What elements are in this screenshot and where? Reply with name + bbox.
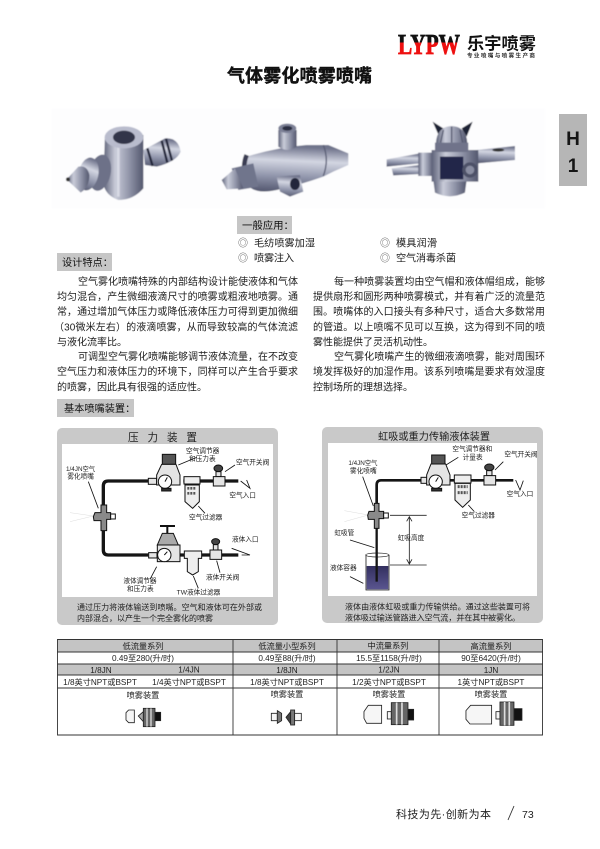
application list: ◎ <box>238 252 248 264</box>
text block: right column: 雾性能提供了灵活机动性。 <box>313 336 433 348</box>
diagram labels: 计量表 <box>463 452 483 461</box>
liquid regulator <box>149 526 180 562</box>
diagram labels: 液体开关阀 <box>206 573 240 582</box>
nozzle fitting <box>368 503 384 528</box>
table text: 15.5至1158(升/时) <box>356 653 422 663</box>
text block: right column: 控制场所的理想选择。 <box>313 380 413 394</box>
diagram labels: 空气调节器和 <box>452 444 492 453</box>
diagram labels: 雾化喷嘴 <box>350 466 377 475</box>
text block: right column: 境发挥极好的加湿作用。该系列喷嘴是要求有效湿度 <box>313 365 545 378</box>
diagram labels: 雾化喷嘴 <box>67 472 94 481</box>
label: general applications <box>237 216 294 234</box>
air filter <box>454 475 471 507</box>
diagram labels: 虹吸管 <box>334 528 355 537</box>
table text: 0.49至88(升/时) <box>258 653 316 663</box>
label: basic nozzle setups <box>57 399 135 417</box>
label: design features <box>57 253 113 271</box>
air valve <box>213 465 225 486</box>
air regulator <box>148 454 180 491</box>
diagram: pressure system <box>66 446 270 596</box>
assembly: low flow <box>126 708 161 727</box>
diagram labels: 液体容器 <box>330 563 357 572</box>
diagram labels: 空气开关阀 <box>236 457 270 466</box>
panel heading: 虹吸或重力传输液体装置 <box>378 430 490 443</box>
footer slogan: 科技为先·创新为本 <box>396 807 491 821</box>
table text: 1/2英寸NPT或BSPT <box>352 677 426 687</box>
table text: 1英寸NPT或BSPT <box>458 677 524 687</box>
nozzle fitting <box>93 505 111 531</box>
section tab H1: 1 <box>568 156 579 177</box>
siphon height bracket <box>390 515 427 565</box>
diagram labels: 1/4JN空气 <box>66 464 96 473</box>
text block: left column: 空气压力和液体压力的环境下，同样可以产生合乎要求 <box>57 365 298 378</box>
panel: pressure setup <box>57 428 278 625</box>
text block: right column: 围。喷嘴体的入口接头有多种尺寸，适合大多数常用 <box>313 305 545 318</box>
diagram labels <box>66 446 270 596</box>
assembly: medium flow <box>364 703 414 725</box>
application list: 空气消毒杀菌 <box>396 252 456 264</box>
photo: nozzle three <box>387 122 515 196</box>
panel heading: 压力装置 <box>128 431 197 444</box>
logo tagline: 专业喷嘴与喷雾生产商 <box>467 52 535 60</box>
assembly: high flow <box>466 702 522 725</box>
table text: 低流量系列 <box>123 641 163 651</box>
text block: right column: 提供扇形和圆形两种喷雾模式，并有着广泛的流量范 <box>313 290 545 303</box>
panel caption <box>345 602 530 622</box>
table text: 喷雾装置 <box>271 689 303 699</box>
page number: 73 <box>522 809 534 821</box>
panel caption: 液体由液体虹吸或重力传输供给。通过这些装置可将 <box>345 602 530 612</box>
panel: siphon or gravity setup <box>322 427 543 623</box>
footer divider slash <box>508 806 514 820</box>
air regulator <box>421 455 450 491</box>
diagram labels: 虹吸高度 <box>398 533 425 542</box>
text block: left column: 与液化流率比。 <box>57 336 127 348</box>
nozzle fitting end <box>111 514 115 519</box>
application list: ◎ <box>238 238 248 250</box>
nozzle assemblies <box>126 702 522 727</box>
table text: 1/8JN <box>276 666 298 675</box>
text block: left column <box>54 275 298 394</box>
table text: 1/4JN <box>178 666 200 674</box>
table text: 1/4英寸NPT或BSPT <box>152 677 226 687</box>
panel caption: 液体吸过输送管路进入空气流，并在其中被雾化。 <box>345 612 520 622</box>
text block: left column: 空气雾化喷嘴特殊的内部结构设计能使液体和气体 <box>78 275 298 288</box>
panel caption <box>77 602 262 623</box>
table text: 1/8英寸NPT或BSPT <box>63 677 137 687</box>
diagram labels <box>330 444 538 572</box>
assembly: low flow small <box>271 710 301 725</box>
text block: right column: 空气雾化喷嘴产生的微细液滴喷雾，能对周围环 <box>334 350 545 363</box>
application list: 模具润滑 <box>396 236 437 250</box>
table shaded rows <box>57 639 543 675</box>
text block: right column <box>313 275 545 394</box>
table text: 中流量系列 <box>368 640 408 650</box>
photo: nozzle two <box>222 124 348 197</box>
table text: 1/2JN <box>378 666 400 674</box>
application list: ◎ <box>380 252 390 264</box>
text block: right column: 的管道。以上喷嘴不见可以互换，这为得到不同的喷 <box>313 320 545 334</box>
table text: 1JN <box>484 666 498 675</box>
panel caption: 内部混合，以产生一个完全雾化的喷雾 <box>77 613 213 623</box>
logo company name: 乐宇喷雾 <box>467 34 536 54</box>
text block: left column: （30微米左右）的液滴喷雾，从而导致较高的气体流滤 <box>54 320 298 334</box>
diagram labels: 和压力表 <box>127 584 154 593</box>
leader arrows <box>350 457 523 583</box>
text block: right column: 每一种喷雾装置均由空气帽和液体帽组成，能够 <box>334 275 545 288</box>
table text: 1/8JN <box>90 666 112 675</box>
label: basic nozzle setups: 基本喷嘴装置： <box>64 402 135 415</box>
diagram labels: 空气入口 <box>229 491 256 500</box>
air valve <box>484 464 496 485</box>
logo <box>398 30 536 61</box>
title: 气体雾化喷雾喷嘴 <box>227 65 372 86</box>
table text <box>63 640 524 700</box>
specification table <box>57 639 543 735</box>
label: general applications: 一般应用： <box>242 219 294 232</box>
product photos <box>52 108 545 208</box>
diagram labels: 和压力表 <box>189 454 216 463</box>
diagram labels: 液体调节器 <box>123 576 157 585</box>
photo: nozzle one <box>66 126 181 200</box>
table text: 喷雾装置 <box>127 690 159 700</box>
table text: 低流量小型系列 <box>258 641 316 651</box>
application list: 毛纺喷雾加湿 <box>254 236 315 250</box>
diagram labels: 空气开关阀 <box>504 450 538 459</box>
text block: left column: 常，通过增加气体压力或降低液体压力可得到更加微细 <box>57 305 298 318</box>
diagram: siphon system <box>330 444 538 590</box>
text block: left column: 可调型空气雾化喷嘴能够调节液体流量，在不改变 <box>78 350 298 363</box>
nozzle fitting end <box>384 513 388 518</box>
application list: 喷雾注入 <box>254 252 294 264</box>
panel caption: 通过压力将液体输送到喷嘴。空气和液体可在外部或 <box>77 602 262 612</box>
application list: ◎ <box>380 238 390 250</box>
table text: 高流量系列 <box>471 641 511 651</box>
diagram labels: 空气调节器 <box>186 446 220 455</box>
label: design features: 设计特点： <box>62 256 113 269</box>
table text: 喷雾装置 <box>373 689 405 699</box>
table text: 0.49至280(升/时) <box>112 653 174 663</box>
table text: 90至6420(升/时) <box>461 653 521 663</box>
liquid valve <box>210 539 222 559</box>
logo wordmark LYPW: LYPW <box>398 30 460 61</box>
section tab H1: H <box>566 129 580 150</box>
liquid filter <box>184 551 202 575</box>
application list <box>238 236 456 264</box>
table text: 1/8英寸NPT或BSPT <box>250 677 324 687</box>
air filter <box>184 477 200 508</box>
diagram labels: TW液体过滤器 <box>177 587 221 596</box>
diagram labels: 1/4JN空气 <box>348 458 378 467</box>
section tab H1 <box>559 114 587 186</box>
diagram labels: 空气过滤器 <box>189 512 223 521</box>
text block: left column: 均匀混合，产生微细液滴尺寸的喷雾或粗液地喷雾。通 <box>57 290 298 303</box>
table grid <box>57 639 543 735</box>
diagram labels: 空气入口 <box>507 489 533 498</box>
siphon tube and liquid container <box>366 527 389 590</box>
leader arrows <box>88 457 250 588</box>
text block: left column: 的喷雾，因此具有很强的适应性。 <box>57 380 207 394</box>
table text: 喷雾装置 <box>475 689 507 699</box>
diagram labels: 空气过滤器 <box>462 511 495 520</box>
diagram labels: 液体入口 <box>232 535 259 544</box>
